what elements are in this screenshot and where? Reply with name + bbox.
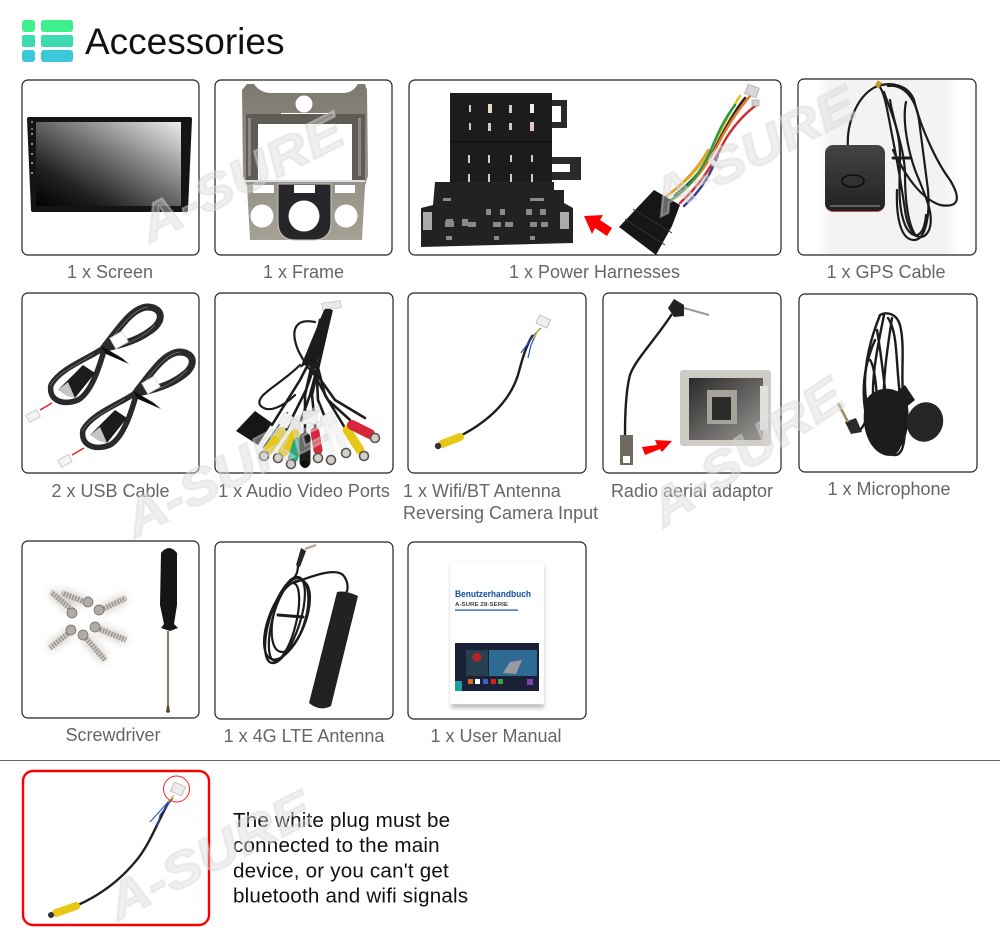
microphone photo (838, 313, 949, 456)
watermarks (96, 74, 866, 932)
watermarks: A-SURE (113, 396, 339, 549)
title: Accessories (85, 21, 284, 62)
panel: wifi/bt antenna (403, 293, 598, 523)
notice text line 3: device, or you can't get (233, 860, 449, 882)
card (22, 293, 199, 473)
watermarks: A-SURE (640, 74, 866, 227)
panel: user manual (408, 542, 586, 746)
card (408, 542, 586, 719)
caption: 1 x Audio Video Ports (218, 481, 390, 501)
panel: screwdriver (22, 541, 199, 745)
card (409, 80, 781, 255)
card (408, 293, 586, 473)
usb cables photo (26, 307, 192, 467)
watermarks: A-SURE (96, 779, 322, 932)
manual subtitle: A-SURE Z8-SERIE (455, 602, 508, 608)
caption: Radio aerial adaptor (611, 481, 773, 501)
screws photo (50, 592, 126, 660)
caption: 1 x Microphone (827, 479, 951, 499)
icon: accessories list (22, 20, 73, 62)
header (22, 20, 284, 62)
card (215, 80, 392, 255)
card (799, 294, 977, 472)
caption line 2: Reversing Camera Input (403, 503, 598, 523)
antenna cable photo (435, 315, 551, 449)
manual head unit image (455, 643, 539, 691)
caption: 1 x Power Harnesses (509, 262, 680, 282)
panel: gps cable (798, 79, 976, 282)
screen photo (27, 117, 192, 212)
caption: 1 x User Manual (430, 726, 562, 746)
watermarks: A-SURE (637, 365, 856, 538)
red card (23, 771, 209, 925)
card (22, 80, 199, 255)
caption: 1 x GPS Cable (826, 262, 946, 282)
aerial photo (620, 299, 771, 465)
manual booklet (450, 562, 544, 708)
card (22, 541, 199, 718)
caption: 1 x 4G LTE Antenna (224, 726, 385, 746)
notice text line 4: bluetooth and wifi signals (233, 884, 468, 908)
caption: 1 x Screen (67, 262, 153, 282)
arrow: red (642, 440, 672, 455)
card (798, 79, 976, 255)
notice text line 2: connected to the main (233, 834, 440, 857)
panel: microphone (799, 294, 977, 499)
watermarks: A-SURE (128, 101, 354, 254)
frame photo (242, 84, 368, 240)
panel: screen (22, 80, 199, 282)
manual title: Benutzerhandbuch (455, 589, 531, 600)
panel: 4g lte antenna (215, 542, 393, 746)
harness wires (664, 96, 755, 206)
card (215, 293, 393, 473)
card (603, 293, 781, 473)
panel: white plug notice (23, 771, 468, 925)
cable photo (48, 776, 190, 918)
rca plugs (268, 425, 370, 462)
gps photo (816, 80, 960, 254)
caption: 1 x Frame (263, 262, 344, 282)
card (215, 542, 393, 719)
notice text: The white plug must be (233, 809, 450, 832)
caption: 2 x USB Cable (51, 481, 170, 501)
panel: power harnesses (409, 80, 781, 282)
panel: audio video ports (215, 293, 393, 501)
panel: usb cable (22, 293, 199, 501)
highlight circle (164, 776, 190, 802)
av cable photo (236, 301, 380, 468)
screwdriver photo (160, 548, 178, 713)
panel: frame (215, 80, 392, 282)
panel: radio aerial adaptor (603, 293, 781, 501)
caption: Screwdriver (65, 725, 161, 745)
arrow: red (584, 215, 612, 236)
lte antenna photo (255, 545, 358, 708)
connector photo (421, 84, 759, 255)
caption: 1 x Wifi/BT Antenna (403, 481, 562, 501)
